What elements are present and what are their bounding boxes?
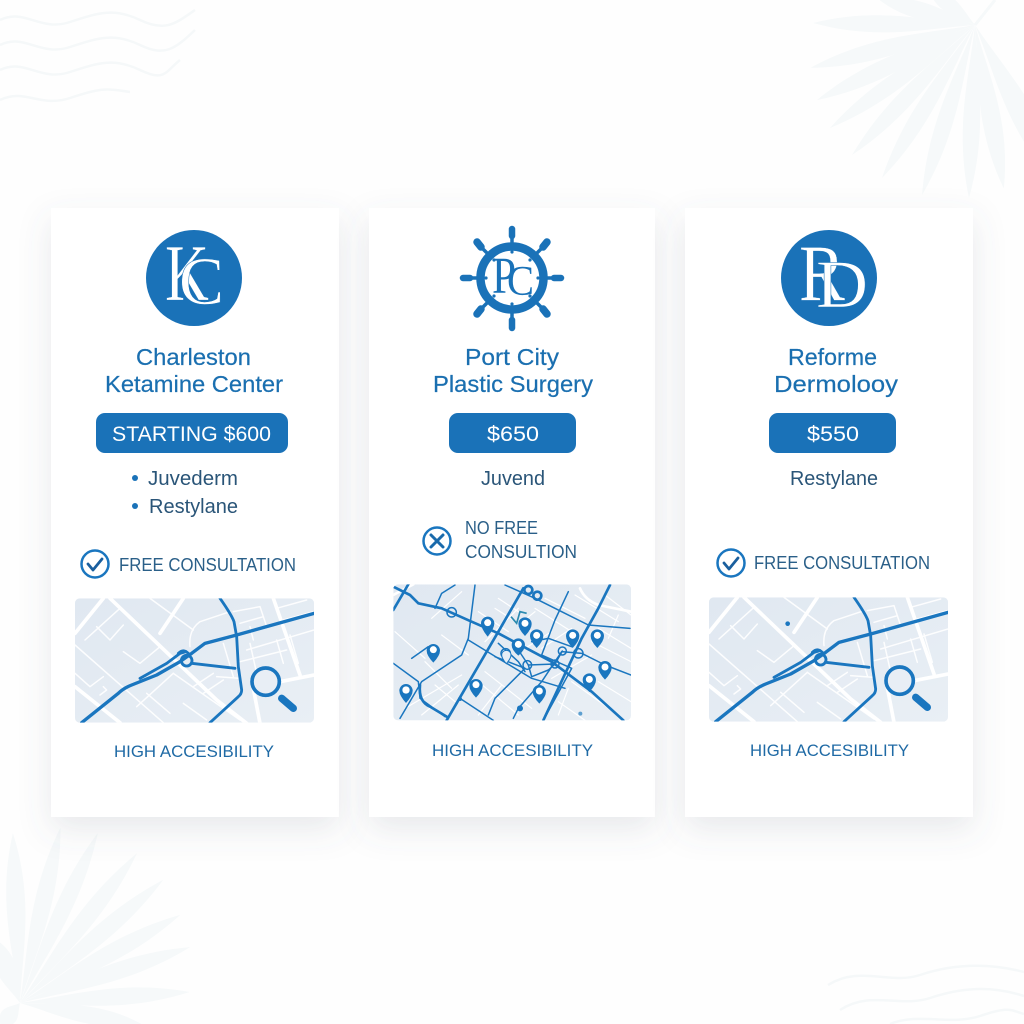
treatments list	[132, 468, 238, 518]
free consultation with check icon	[82, 550, 296, 578]
treatment: Restylane	[790, 468, 878, 490]
free consultation with check icon	[718, 550, 930, 576]
background palm leaf top right	[808, 0, 1024, 198]
price badge	[96, 413, 288, 453]
map with location pins	[393, 584, 631, 720]
treatments list: Juvederm	[148, 468, 238, 490]
map with magnifier	[75, 598, 314, 723]
heading: clinic name: Reforme	[788, 344, 877, 370]
panel: Port City Plastic Surgery	[369, 208, 655, 817]
icon: KC logo	[146, 230, 242, 326]
no free consultation with cross icon: NO FREE	[465, 518, 538, 538]
accessibility label: HIGH ACCESIBILITY	[750, 741, 909, 760]
price badge: STARTING $600	[112, 423, 271, 446]
price badge	[449, 413, 576, 453]
panel: Reforme Dermolooy	[685, 208, 973, 817]
icon: ship wheel PC logo	[463, 229, 561, 328]
background waves top left	[0, 10, 195, 101]
treatments list: Restylane	[149, 496, 238, 518]
icon: ship wheel PC logo: P	[492, 248, 516, 305]
free consultation with check icon: FREE CONSULTATION	[119, 555, 296, 575]
heading: clinic name: Dermolooy	[774, 371, 899, 397]
background waves bottom right	[828, 966, 1024, 1024]
heading: clinic name	[105, 344, 283, 397]
icon: magnifier	[252, 668, 293, 708]
no free consultation with cross icon	[424, 518, 577, 562]
price badge: $550	[807, 423, 859, 446]
icon: RD logo	[781, 230, 877, 326]
heading: clinic name	[433, 344, 594, 397]
heading: clinic name: Port City	[465, 344, 560, 370]
treatment: Juvend	[481, 468, 545, 490]
heading: clinic name: Ketamine Center	[105, 371, 283, 397]
icon: magnifier	[886, 667, 927, 707]
icon: KC logo: C	[179, 243, 224, 319]
icon: RD logo: R	[799, 230, 846, 318]
panel: Charleston Ketamine Center	[51, 208, 339, 817]
icon: RD logo: D	[816, 246, 868, 322]
free consultation with check icon: FREE CONSULTATION	[754, 553, 930, 573]
no free consultation with cross icon: CONSULTION	[465, 542, 577, 562]
location pins	[399, 617, 612, 704]
price badge	[769, 413, 896, 453]
accessibility label: HIGH ACCESIBILITY	[432, 741, 593, 760]
price badge: $650	[487, 423, 539, 446]
background palm leaf bottom left	[0, 826, 193, 1024]
icon: KC logo: K	[165, 230, 209, 318]
heading: clinic name: Plastic Surgery	[433, 371, 594, 397]
heading: clinic name: Charleston	[136, 344, 251, 370]
icon: ship wheel PC logo: C	[507, 259, 534, 305]
heading: clinic name	[774, 344, 899, 397]
accessibility label: HIGH ACCESIBILITY	[114, 742, 274, 761]
map with magnifier	[709, 597, 948, 722]
